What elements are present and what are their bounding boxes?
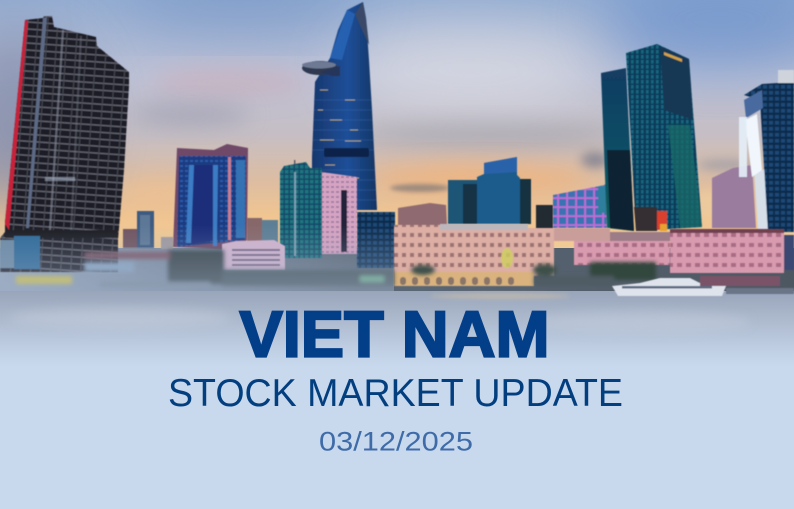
building: dark block behind Bitexco	[357, 212, 395, 268]
building: Bitexco Financial Tower	[302, 2, 377, 210]
sky with sunset clouds	[0, 0, 794, 300]
building: distant blocks	[161, 218, 278, 249]
subtitle: STOCK MARKET UPDATE: STOCK MARKET UPDATE	[168, 372, 623, 415]
skyline: background buildings	[123, 211, 395, 268]
buildings: right edge high-rise and pink tower	[712, 70, 794, 232]
buildings: teal and pink towers	[280, 160, 357, 258]
building: purple-lit grid facade	[553, 184, 607, 228]
building: small tower	[137, 211, 154, 248]
building: blue office tower	[173, 144, 248, 250]
building: low pink block with sign	[222, 240, 285, 270]
building: pink heritage hotel	[394, 203, 672, 286]
title: VIET NAM: VIET NAM	[240, 298, 550, 370]
building: small block	[123, 229, 137, 248]
building: twin glass towers	[601, 44, 702, 231]
river water	[0, 291, 794, 367]
building: scaffolded tower with red edge	[0, 16, 129, 272]
fade over lower skyline	[0, 225, 394, 292]
cruise boat	[612, 276, 794, 296]
date: 03/12/2025	[319, 426, 473, 456]
riverside trees and embankment	[16, 250, 656, 287]
riverside ground mass	[0, 248, 794, 292]
building: pink colonial block, right	[670, 229, 794, 273]
buildings: blue mid-rise cluster	[448, 157, 553, 229]
